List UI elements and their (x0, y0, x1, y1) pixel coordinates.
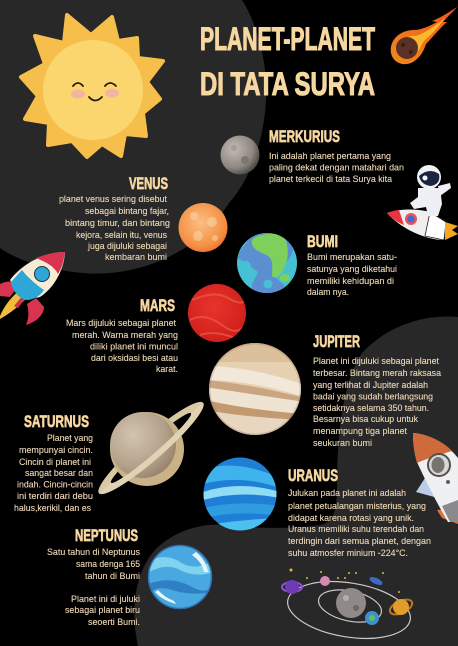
icon: left rocket (0, 252, 65, 325)
title: PLANET-PLANET (200, 21, 375, 57)
panel: Venus text: bintang timur, dan bintang (65, 218, 170, 229)
panel: Venus text: planet venus sering disebut (59, 194, 167, 205)
panel: Venus text: kejora, selain itu, venus (76, 230, 167, 241)
panel: Uranus text: Uranus memiliki suhu terendah dan (288, 524, 424, 535)
planet: Merkurius (220, 136, 260, 174)
panel: Bumi text (307, 232, 397, 298)
planet: Saturnus with ring (91, 394, 211, 502)
panel: Saturnus text: Cincin di planet ini (19, 457, 91, 468)
planet: Neptunus (146, 545, 214, 609)
panel: Neptunus text: NEPTUNUS (75, 526, 138, 545)
panel: Neptunus text (47, 526, 140, 628)
panel: Bumi text: dalam nya. (307, 287, 349, 298)
title (200, 21, 375, 102)
panel: Merkurius text: planet terkecil di tata Surya kita (269, 174, 393, 185)
panel: Merkurius text (269, 127, 404, 185)
title: DI TATA SURYA (200, 66, 375, 102)
panel: Venus text: kembaran bumi (105, 252, 167, 263)
panel: Jupiter text: seukuran bumi (313, 438, 372, 449)
panel: Merkurius text: MERKURIUS (269, 127, 340, 146)
panel: Neptunus text: sama denga 165 (76, 559, 140, 570)
icon: solar system (282, 568, 414, 646)
panel: Uranus text: suhu atmosfer minium -224°C. (288, 548, 408, 559)
panel: Jupiter text: menampung tiga planet (313, 426, 407, 437)
panel: Saturnus text: Planet yang (47, 433, 93, 444)
panel: Uranus text: planet petualangan misterius, yang (288, 501, 426, 512)
panel: Venus text: juga dijuluki sebagai (87, 241, 167, 252)
icon: large right rocket (413, 433, 458, 524)
panel: Merkurius text: Ini adalah planet pertama yang (269, 151, 391, 162)
panel: Uranus text (288, 466, 431, 559)
panel: Venus text (59, 174, 170, 263)
panel: Jupiter text: JUPITER (313, 332, 360, 351)
panel: Merkurius text: paling dekat dengan matahari dan (269, 162, 404, 174)
panel: Neptunus text: Planet ini di juluki (71, 594, 140, 605)
panel: Neptunus text: sebagai planet biru (65, 605, 140, 616)
panel: Mars text: dari oksidasi besi atau (91, 353, 178, 364)
planet: Bumi (237, 230, 297, 295)
panel: Jupiter text: Planet ini dijuluki sebagai planet (313, 356, 439, 367)
background blob: bottom right (134, 317, 458, 646)
panel: Uranus text: didapat karena rotasi yang unik. (288, 513, 414, 524)
panel: Neptunus text: Satu tahun di Neptunus (47, 547, 140, 558)
panel: Jupiter text (313, 332, 442, 449)
panel: Uranus text: terdingin dari semua planet, dengan (288, 536, 431, 547)
panel: Neptunus text: seoerti Bumi. (88, 617, 140, 628)
panel: Bumi text: memiliki kehidupan di (307, 276, 394, 287)
panel: Saturnus text: SATURNUS (24, 412, 89, 431)
panel: Mars text: merah. Warna merah yang (72, 330, 178, 341)
panel: Saturnus text: sangat besar dan (25, 468, 93, 479)
planet: Uranus (204, 458, 276, 530)
planet: Jupiter (209, 343, 301, 435)
panel: Mars text: karat. (156, 364, 178, 375)
icon: astronaut on rocket (387, 165, 458, 240)
panel: Saturnus text: ini terdiri dari debu (17, 491, 93, 502)
panel: Saturnus text: indah. Cincin-cincin (17, 480, 93, 490)
panel: Uranus text: URANUS (288, 466, 338, 485)
panel: Uranus text: Julukan pada planet ini adalah (288, 488, 406, 499)
panel: Neptunus text: tahun di Bumi (85, 571, 140, 582)
panel: Mars text: Mars dijuluki sebagai planet (66, 318, 176, 329)
panel: Venus text: VENUS (129, 174, 168, 193)
panel: Jupiter text: yang terlihat di Jupiter adalah (313, 380, 428, 391)
panel: Saturnus text: mempunyai cincin. (19, 445, 93, 456)
icon: comet (391, 7, 457, 64)
panel: Bumi text: Bumi merupakan satu- (307, 252, 397, 263)
planet: Venus (178, 203, 228, 252)
icon: smiling sun (21, 15, 163, 157)
panel: Bumi text: satunya yang diketahui (307, 264, 397, 275)
panel: Jupiter text: terbesar. Bintang merah raksasa (313, 368, 442, 379)
panel: Mars text: diliki planet ini muncul (90, 342, 178, 352)
panel: Mars text (66, 296, 178, 375)
panel: Jupiter text: Besarnya bisa cukup untuk (313, 414, 418, 425)
panel: Jupiter text: badai yang sudah berlangsung (313, 392, 433, 402)
panel: Saturnus text (14, 412, 93, 514)
background blob: top left (0, 0, 266, 274)
panel: Jupiter text: setidaknya selama 350 tahun. (313, 403, 429, 414)
panel: Bumi text: BUMI (307, 232, 338, 251)
planet: Mars (188, 284, 246, 342)
panel: Mars text: MARS (140, 296, 175, 315)
panel: Venus text: sebagai bintang fajar, (85, 206, 169, 217)
panel: Saturnus text: halus,kerikil, dan es (14, 503, 91, 514)
